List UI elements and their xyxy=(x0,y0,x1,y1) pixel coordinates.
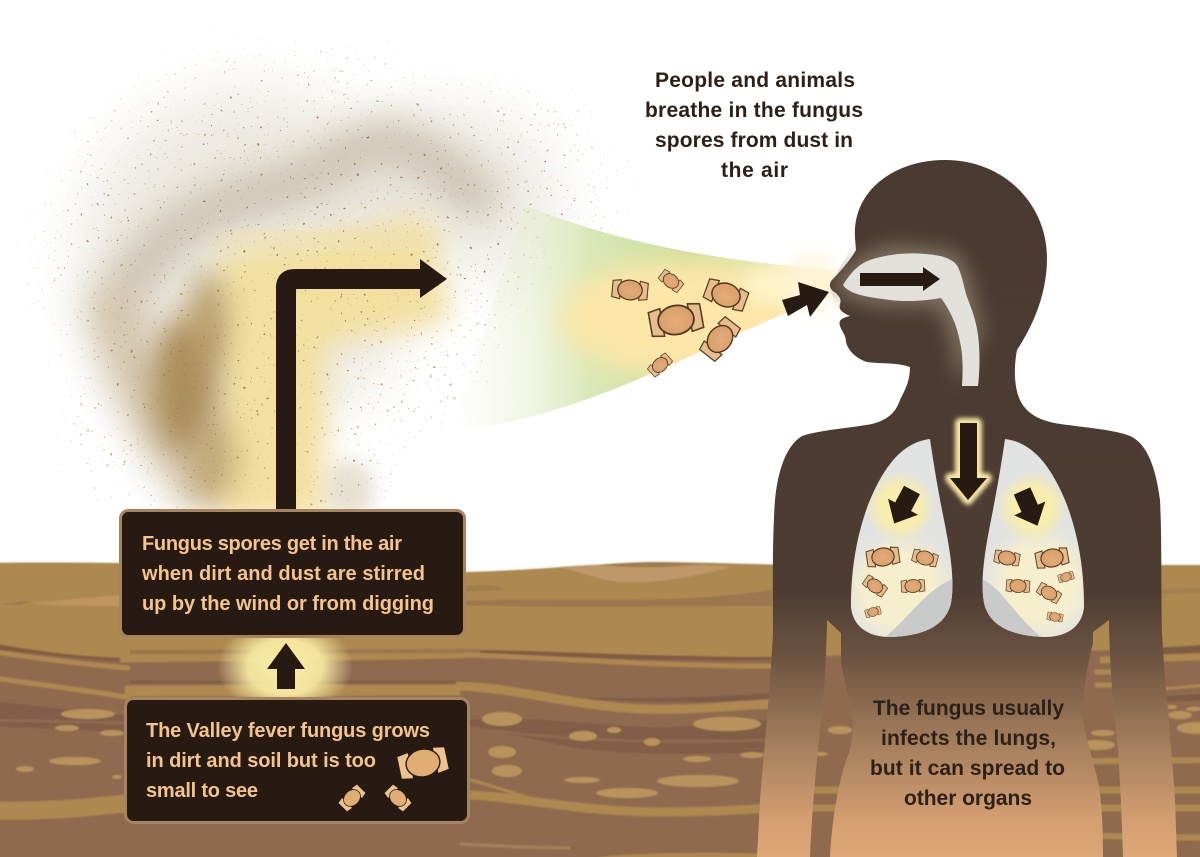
arrow into the nose xyxy=(782,282,829,317)
arrows in lungs xyxy=(879,482,1053,533)
airway xyxy=(843,253,980,386)
arrow down the windpipe xyxy=(950,423,987,500)
soil pebbles xyxy=(16,705,1200,798)
ground soil layers xyxy=(0,562,1200,857)
callout: fungus grows in soil: The Valley fever fungus grows xyxy=(146,720,430,742)
text: infection spreads xyxy=(870,697,1065,810)
text: breathing in spores: spores from dust in xyxy=(655,129,853,152)
text: infection spreads: infects the lungs, xyxy=(881,727,1056,750)
callout: fungus grows in soil: in dirt and soil but is too xyxy=(146,750,376,772)
text: infection spreads: The fungus usually xyxy=(873,697,1064,720)
spores in lungs xyxy=(862,546,1075,623)
up arrow between boxes xyxy=(267,643,305,689)
text: breathing in spores: breathe in the fungus xyxy=(645,99,863,122)
airflow cone with spores xyxy=(476,205,840,428)
callout: spores get in the air xyxy=(120,510,464,636)
callout: spores get in the air: up by the wind or from digging xyxy=(142,593,434,615)
text: breathing in spores xyxy=(645,69,863,182)
callout: spores get in the air: Fungus spores get in the air xyxy=(142,533,402,555)
arrow through the nose xyxy=(860,267,940,291)
spores in box xyxy=(338,745,449,812)
callout: fungus grows in soil: small to see xyxy=(146,780,258,802)
text: infection spreads: but it can spread to xyxy=(870,757,1065,780)
right lung xyxy=(980,439,1088,640)
callout: spores get in the air: when dirt and dust are stirred xyxy=(141,563,425,585)
bent arrow from box to air xyxy=(276,259,447,512)
left lung xyxy=(851,439,955,640)
glow behind up arrow xyxy=(217,617,353,717)
person silhouette xyxy=(757,160,1177,857)
spores in the air xyxy=(612,268,750,378)
text: breathing in spores: the air xyxy=(721,159,788,182)
callout: fungus grows in soil xyxy=(126,698,468,822)
lungs xyxy=(851,439,1088,640)
dust speckles xyxy=(55,60,610,540)
text: infection spreads: other organs xyxy=(904,787,1032,810)
dust cloud xyxy=(80,90,570,520)
text: breathing in spores: People and animals xyxy=(655,69,855,92)
